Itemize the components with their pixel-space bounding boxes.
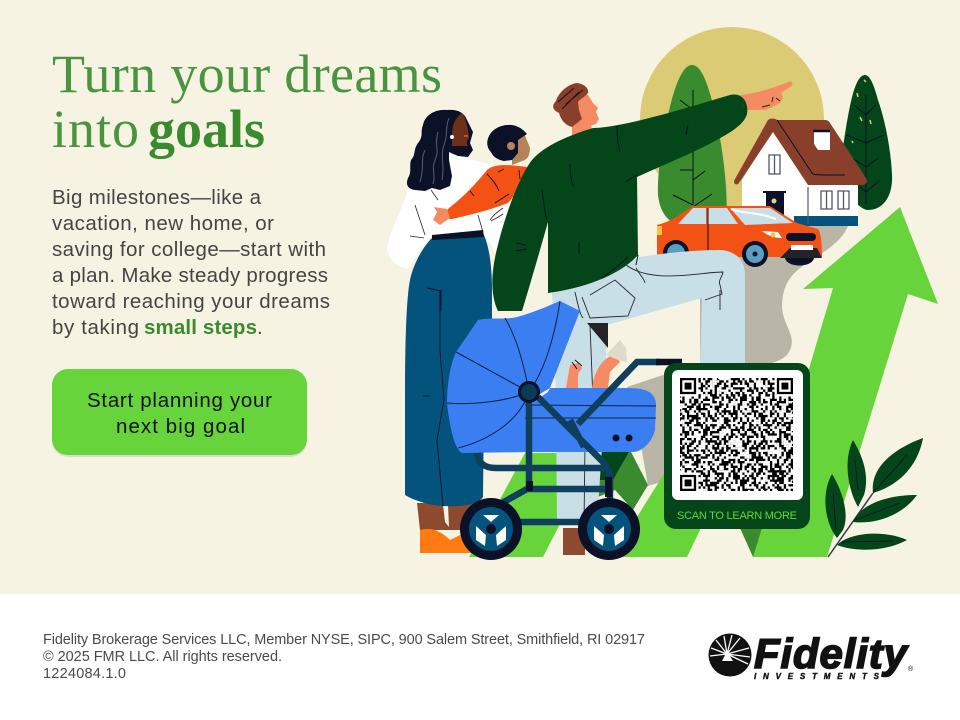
Fidelity logo: Fidelity bbox=[754, 630, 910, 677]
jeans bbox=[552, 250, 745, 525]
legal text bbox=[43, 632, 645, 682]
neck bbox=[572, 118, 592, 137]
left tree bbox=[658, 65, 727, 226]
body text: saving for college—start with bbox=[52, 238, 326, 261]
title bbox=[52, 44, 442, 159]
road bbox=[627, 226, 848, 486]
hub bbox=[520, 382, 538, 402]
title: into bbox=[52, 99, 139, 159]
legal text: © 2025 FMR LLC. All rights reserved. bbox=[43, 649, 282, 665]
child face bbox=[512, 133, 530, 165]
footer panel bbox=[0, 594, 960, 720]
title: Turn your dreams bbox=[52, 44, 442, 104]
house bbox=[734, 118, 867, 226]
QR code bbox=[680, 378, 793, 491]
head bbox=[572, 92, 599, 127]
legs and shoes bbox=[417, 503, 475, 530]
green arrow bbox=[753, 207, 938, 557]
body text bbox=[52, 186, 330, 339]
belt bbox=[432, 230, 484, 240]
sweater bbox=[492, 94, 747, 311]
body text: by taking bbox=[52, 316, 139, 339]
man bbox=[492, 82, 792, 555]
stroller bbox=[447, 301, 682, 560]
dots bbox=[612, 434, 620, 442]
button bbox=[52, 369, 307, 457]
button: next big goal bbox=[116, 415, 245, 438]
left wheel bbox=[460, 498, 522, 560]
title: goals bbox=[148, 99, 265, 159]
earring bbox=[450, 135, 454, 139]
hair bbox=[407, 110, 473, 191]
shoe bbox=[563, 528, 585, 555]
QR card bbox=[664, 363, 810, 529]
zigzag arrow band left bbox=[469, 453, 562, 557]
body text: toward reaching your dreams bbox=[52, 290, 330, 313]
child hand bbox=[433, 207, 450, 225]
body text: vacation, new home, or bbox=[52, 212, 274, 235]
body text: . bbox=[257, 316, 263, 339]
ribs bbox=[447, 301, 656, 448]
Fidelity logo bbox=[708, 630, 914, 681]
right wheel bbox=[578, 498, 640, 560]
body text: a plan. Make steady progress bbox=[52, 264, 328, 287]
illustration bbox=[387, 27, 938, 560]
basket bbox=[462, 388, 656, 452]
right tree bbox=[842, 75, 892, 210]
frame bbox=[477, 362, 660, 522]
skirt bbox=[405, 233, 492, 506]
arrow shadow bbox=[740, 528, 762, 557]
baby bbox=[566, 340, 627, 388]
leaf sprig bbox=[825, 438, 923, 557]
body text: small steps bbox=[144, 316, 257, 339]
hair bbox=[553, 83, 588, 127]
legal text: 1224084.1.0 bbox=[43, 666, 126, 682]
legal text: Fidelity Brokerage Services LLC, Member NYSE, SIPC, 900 Salem Street, Smithfield, RI 02917 bbox=[43, 632, 645, 648]
zigzag arrow band right bbox=[612, 445, 700, 557]
child arm bbox=[447, 165, 527, 219]
Fidelity logo: INVESTMENTS bbox=[754, 672, 880, 681]
face bbox=[452, 113, 469, 146]
shadow under knee bbox=[587, 323, 608, 348]
logo burst icon bbox=[708, 634, 752, 676]
QR caption: SCAN TO LEARN MORE bbox=[677, 510, 797, 522]
woman bbox=[387, 110, 512, 553]
shirt bbox=[387, 153, 512, 269]
hood bbox=[447, 301, 580, 453]
button: Start planning your bbox=[87, 389, 272, 412]
zigzag shadow bbox=[598, 450, 648, 510]
car bbox=[657, 206, 822, 267]
child hair bbox=[487, 125, 527, 161]
body text: Big milestones—like a bbox=[52, 186, 262, 209]
Fidelity logo: ® bbox=[908, 665, 914, 673]
child bbox=[433, 125, 530, 225]
pointing hand bbox=[735, 82, 792, 110]
sun bbox=[640, 27, 824, 211]
